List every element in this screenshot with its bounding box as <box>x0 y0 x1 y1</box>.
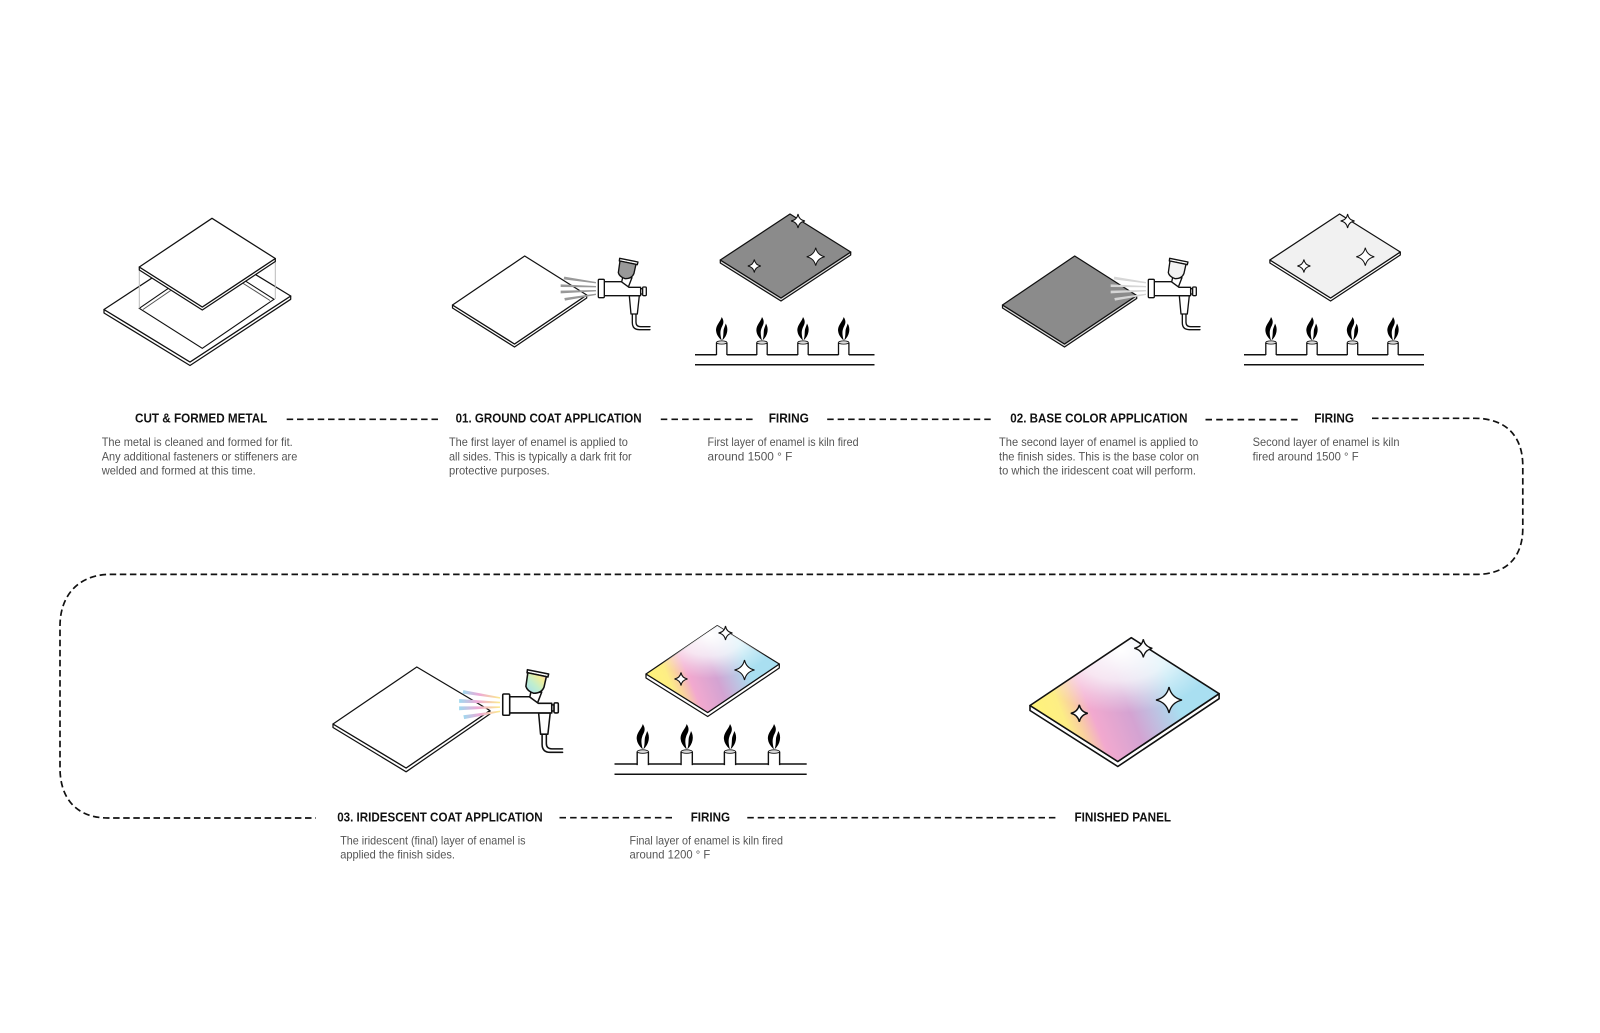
heading: second firing: FIRING <box>1314 412 1354 426</box>
panel: final firing illustration <box>614 626 807 774</box>
text block: base color description: to which the iridescent coat will perform. <box>999 465 1196 478</box>
text block: second firing description: Second layer of enamel is kiln <box>1253 436 1400 449</box>
icon: kiln burners <box>695 317 874 365</box>
icon: grey spray <box>561 277 596 301</box>
heading: base color application: 02. BASE COLOR APPLICATION <box>1010 412 1188 426</box>
text block: base color description: The second layer of enamel is applied to <box>999 436 1198 449</box>
text block: iridescent coat description <box>340 834 526 862</box>
text block: ground coat description: all sides. This is typically a dark frit for <box>449 450 632 463</box>
icon: kiln burners <box>1244 317 1424 365</box>
icon: iridescent spray <box>459 690 500 719</box>
heading: final firing: FIRING <box>691 811 730 825</box>
text block: ground coat description: protective purposes. <box>449 465 550 478</box>
text block: second firing description <box>1253 436 1400 463</box>
text block: base color description: the finish sides. This is the base color on <box>999 450 1199 463</box>
heading: first firing: FIRING <box>769 412 809 426</box>
heading: ground coat application: 01. GROUND COAT APPLICATION <box>456 412 642 426</box>
icon: spray gun with grey cup <box>598 258 650 330</box>
heading: finished panel: FINISHED PANEL <box>1074 811 1171 825</box>
text block: ground coat description: The first layer of enamel is applied to <box>449 436 628 449</box>
text block: ground coat description <box>449 436 632 478</box>
panel: ground coat application illustration <box>452 256 650 347</box>
text block: iridescent coat description: The iridescent (final) layer of enamel is <box>340 834 526 847</box>
text block: final firing description <box>630 834 783 862</box>
text block: cut and formed metal description: Any additional fasteners or stiffeners are <box>102 450 297 463</box>
heading: iridescent coat application: 03. IRIDESCENT COAT APPLICATION <box>337 811 543 825</box>
arrow: dashed process flow connectors <box>60 418 1523 818</box>
text block: cut and formed metal description <box>101 436 297 478</box>
text block: cut and formed metal description: The metal is cleaned and formed for fit. <box>102 436 293 449</box>
panel: base color application illustration <box>1002 256 1200 347</box>
icon: light spray <box>1111 277 1146 301</box>
text block: first firing description: First layer of enamel is kiln fired <box>708 436 859 449</box>
panel: cut and formed metal illustration <box>104 218 291 366</box>
panel: finished panel illustration <box>1030 638 1219 766</box>
text block: first firing description: around 1500 ° F <box>708 450 792 463</box>
icon: kiln burners <box>614 724 807 774</box>
icon: sparkles <box>748 214 825 272</box>
panel: iridescent coat application illustration <box>333 667 563 772</box>
text block: second firing description: fired around 1500 ° F <box>1253 450 1359 463</box>
icon: spray gun with white cup <box>1148 258 1200 330</box>
text block: final firing description: Final layer of enamel is kiln fired <box>630 834 783 847</box>
text block: base color description <box>999 436 1199 478</box>
panel: second firing illustration <box>1244 214 1424 365</box>
heading: cut and formed metal: CUT & FORMED METAL <box>135 412 268 426</box>
icon: spray gun with iridescent cup <box>503 670 563 752</box>
icon: sparkles <box>674 626 754 686</box>
text block: cut and formed metal description: welded and formed at this time. <box>101 465 256 478</box>
text block: first firing description <box>708 436 859 463</box>
text block: final firing description: around 1200 ° F <box>630 849 710 862</box>
text block: iridescent coat description: applied the finish sides. <box>340 849 455 862</box>
icon: sparkles <box>1071 639 1182 722</box>
icon: sparkles <box>1297 214 1374 272</box>
panel: first firing illustration <box>695 214 874 365</box>
